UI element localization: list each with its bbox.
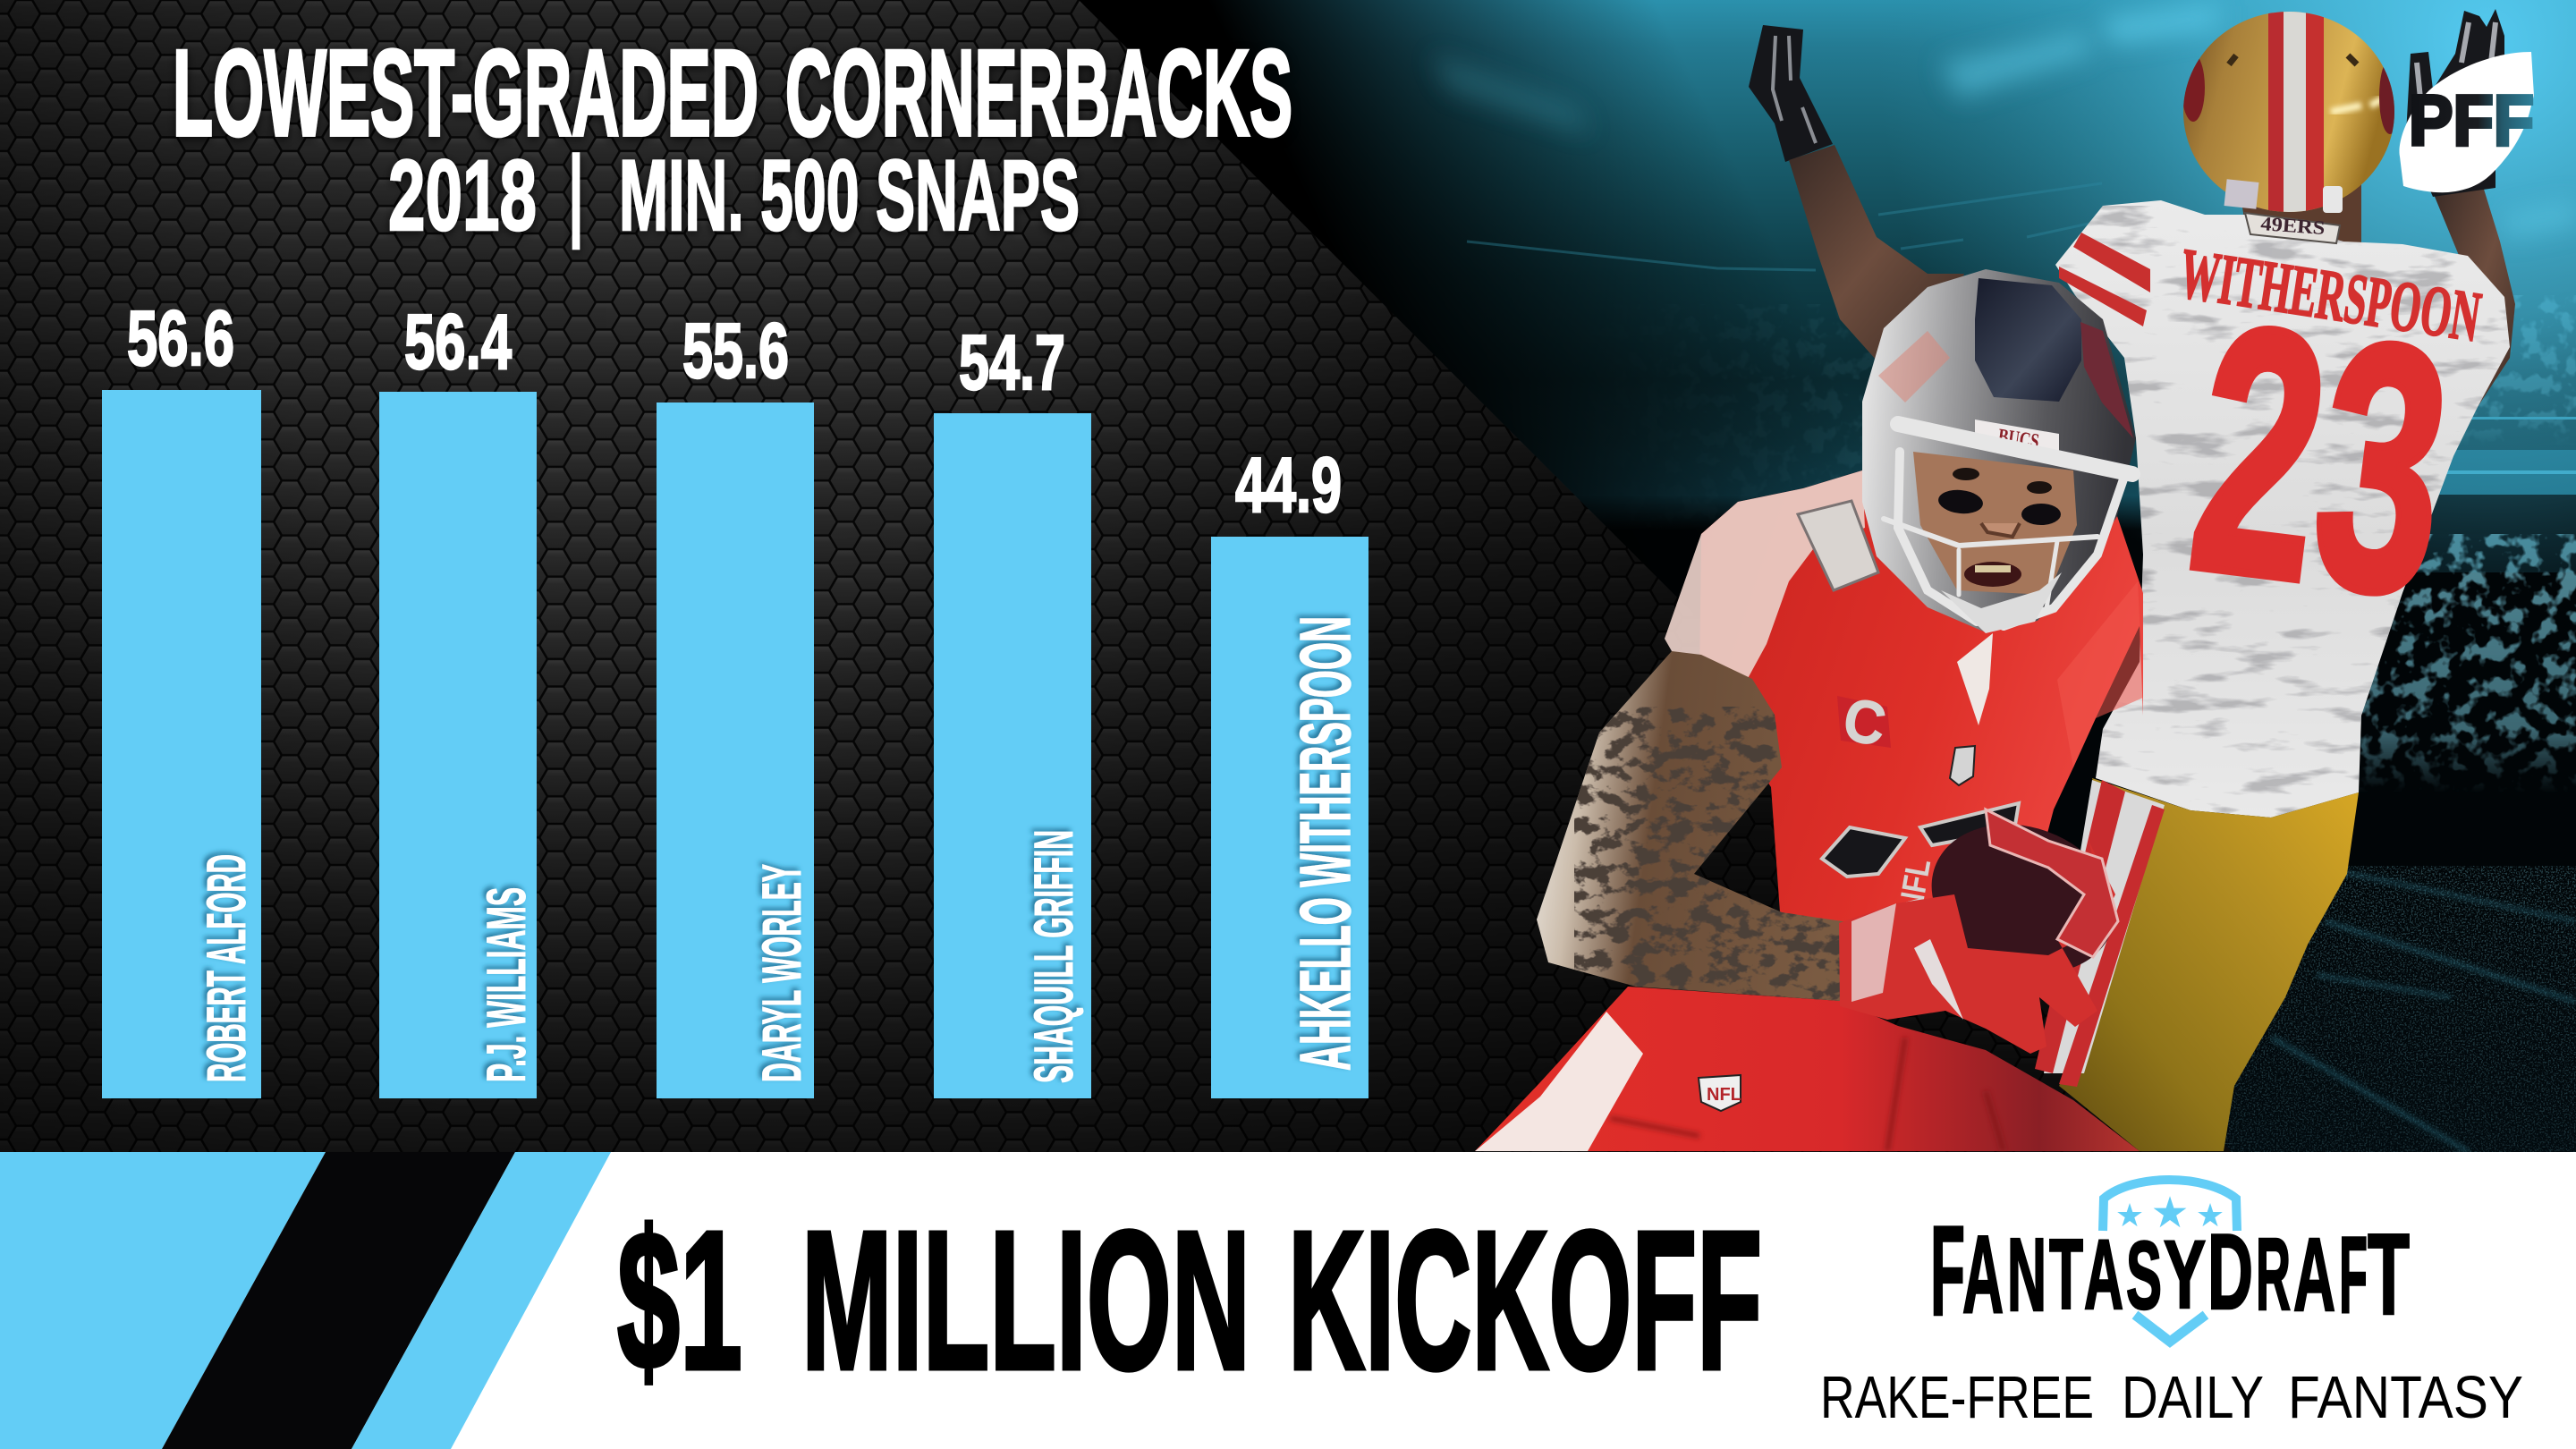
bar: Ahkello Witherspoon: AHKELLO WITHERSPOON (1285, 616, 1365, 1071)
helmet nameplate (1975, 419, 2059, 454)
logo stars (2115, 1190, 2224, 1237)
tagline: FANTASY (2288, 1364, 2523, 1431)
face mask (1884, 424, 2132, 626)
stadium lower crowd (2290, 534, 2576, 793)
jersey NFL shield (1950, 746, 1975, 785)
tattooed arm (1537, 651, 1854, 1001)
overexposed shoulder (1665, 470, 1865, 693)
helmet centre stripe (2268, 0, 2284, 215)
bar: P.J. Williams: P.J. WILLIAMS (476, 887, 537, 1082)
logo wordmark: A (2293, 1216, 2335, 1333)
gold helmet (2183, 12, 2394, 212)
neck (2236, 170, 2361, 255)
pants NFL shield (1699, 1075, 1741, 1111)
left crowd (1565, 304, 1941, 528)
gold pants (2059, 778, 2359, 1151)
collar V (1957, 633, 1993, 725)
logo: FantasyDraft (1930, 1180, 2410, 1343)
bar: Robert Alford: 56.6 (127, 295, 234, 382)
eyes (1953, 468, 2052, 494)
bar: Ahkello Witherspoon (1211, 442, 1368, 1098)
helmet navy panel (1975, 278, 2081, 402)
bar: P.J. Williams: 56.4 (404, 299, 512, 386)
jersey collar (2245, 212, 2340, 243)
helmet 49ers logos (2183, 59, 2205, 122)
nose (1981, 523, 2020, 537)
jersey shade panel (2057, 581, 2143, 767)
logo wordmark: A (1962, 1214, 2004, 1336)
logo wordmark: F (1930, 1200, 1965, 1343)
panel: honeycomb background (0, 0, 2232, 1152)
background: teal stadium (1073, 0, 2576, 1152)
background: black base (0, 0, 2576, 1152)
top glow (1699, 0, 2576, 572)
subtitle (388, 136, 1080, 251)
glove swoosh (1914, 939, 1963, 1020)
logo stars: ★ (2115, 1197, 2144, 1233)
tagline: DAILY (2122, 1364, 2264, 1431)
tattoo texture (1574, 707, 1840, 1000)
logo wordmark: A (2084, 1220, 2123, 1330)
bar: P.J. Williams (379, 299, 537, 1098)
field yard lines (2272, 872, 2576, 1152)
bar: Robert Alford (102, 295, 261, 1098)
logo wordmark: D (2207, 1212, 2253, 1332)
subtitle: MIN. 500 SNAPS (619, 140, 1080, 251)
logo wordmark: Y (2164, 1220, 2206, 1328)
helmet highlights (2331, 98, 2384, 112)
stadium roof lines (1467, 183, 2102, 270)
jersey shoulder number (1798, 501, 1878, 590)
logo wordmark: T (2368, 1210, 2410, 1339)
logo stars: ★ (2196, 1197, 2224, 1233)
sleeve stripes (2059, 233, 2150, 326)
bar: Daryl Worley (657, 308, 814, 1098)
raised left glove (1749, 25, 1833, 162)
footer headline: $1 (617, 1190, 742, 1411)
helmet red decal (1878, 331, 1950, 402)
subtitle: 2018 (388, 140, 537, 251)
footer headline: MILLION (801, 1190, 1250, 1411)
bar chart (102, 295, 1368, 1098)
subtitle: | (569, 136, 583, 249)
raised right arm (2433, 183, 2515, 420)
logo stars: ★ (2150, 1190, 2190, 1237)
bar: Daryl Worley: DARYL WORLEY (751, 864, 812, 1082)
bar: Shaquill Griffin: SHAQUILL GRIFFIN (1023, 830, 1084, 1083)
jersey dirt texture (2048, 206, 2522, 823)
logo wordmark (1930, 1200, 2410, 1343)
red glove (1839, 841, 2115, 1054)
chin cup (1941, 572, 2062, 633)
pants shadow folds (1610, 1038, 2004, 1151)
footer headline: KICKOFF (1288, 1190, 1762, 1411)
logo wordmark: S (2126, 1221, 2162, 1329)
logo shield (2103, 1180, 2237, 1342)
raised left arm (1789, 145, 1964, 360)
player: Witherspoon, 49ers (1749, 0, 2522, 1151)
stadium lit band (2326, 417, 2576, 534)
footer band (0, 1152, 2576, 1449)
bar: Shaquill Griffin: 54.7 (959, 319, 1065, 406)
logo: PFF: PFF (2409, 80, 2534, 160)
jersey collar: 49ERS (2260, 212, 2326, 239)
helmet vents (2229, 55, 2357, 64)
mouth (1964, 562, 2021, 587)
helmet nameplate: BUCS (1996, 425, 2040, 453)
logo wordmark: F (2339, 1214, 2368, 1335)
helmet side logo (2080, 322, 2133, 438)
white jersey (2055, 200, 2510, 818)
overexposed thigh (1475, 1012, 1643, 1151)
football: NFL (1893, 856, 1938, 916)
bar: Ahkello Witherspoon: 44.9 (1235, 442, 1342, 529)
raised right glove (2406, 9, 2504, 197)
light beams (1431, 4, 2576, 237)
player: Evans, Buccaneers (1475, 269, 2143, 1151)
glove highlights (1773, 36, 1816, 143)
tagline: RAKE-FREE (1820, 1364, 2094, 1431)
field grain (2147, 866, 2576, 1152)
red pants (1475, 987, 2140, 1151)
glove palm logo (1852, 903, 1896, 1002)
bar: Shaquill Griffin (934, 319, 1091, 1098)
pants NFL shield: NFL (1707, 1085, 1741, 1105)
gray helmet (1862, 269, 2136, 632)
glove fingers (1986, 809, 2118, 957)
stadium upper crowd tier (2236, 295, 2576, 447)
jersey number panels (1822, 803, 2019, 877)
logo wordmark: N (2007, 1216, 2046, 1333)
red jersey (1699, 470, 2143, 1002)
logo: PFF (2399, 52, 2534, 192)
title: CORNERBACKS (785, 25, 1292, 162)
bar: Robert Alford: ROBERT ALFORD (196, 854, 257, 1082)
football (1893, 800, 2136, 998)
logo wordmark: R (2256, 1217, 2291, 1332)
tagline (1820, 1364, 2523, 1431)
face (1913, 452, 2077, 595)
bar: Daryl Worley: 55.6 (682, 308, 789, 394)
helmet flag decal (2224, 179, 2258, 209)
helmet NFL decal (2323, 186, 2343, 213)
pants stripe (2035, 780, 2165, 1087)
eye black (1937, 487, 2061, 525)
footer stripes (0, 1152, 611, 1449)
captain patch: C (1838, 685, 1891, 759)
logo wordmark: T (2049, 1219, 2083, 1330)
black fade (1073, 0, 2576, 1152)
title: LOWEST-GRADED (173, 25, 758, 162)
